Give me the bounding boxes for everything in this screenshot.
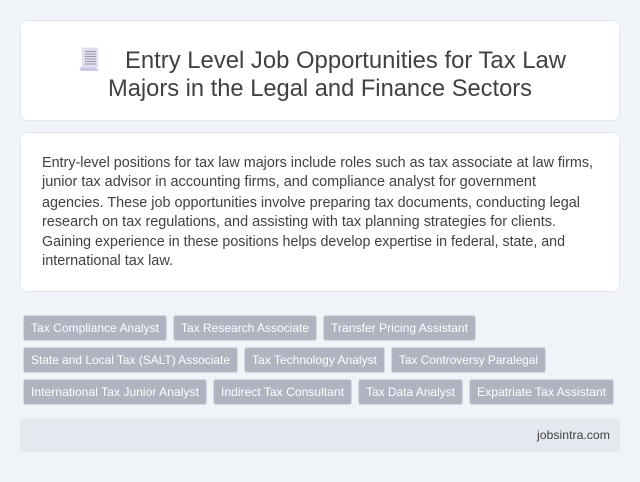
- tag: Tax Data Analyst: [366, 385, 456, 399]
- text block: description: Entry-level positions for tax law majors include roles such as tax associate at law firms,: [42, 155, 593, 171]
- tag: Tax Technology Analyst: [252, 353, 378, 367]
- title: [108, 47, 567, 102]
- tag: Expatriate Tax Assistant: [477, 385, 607, 399]
- footer text: jobsintra.com: [536, 428, 610, 442]
- text block: description: agencies. These job opportunities involve preparing tax documents, conducting legal: [42, 195, 580, 211]
- tag: [24, 348, 238, 372]
- tag: Transfer Pricing Assistant: [331, 321, 469, 335]
- tag: International Tax Junior Analyst: [31, 385, 200, 399]
- panel: title card: [20, 20, 620, 120]
- text block: description: junior tax advisor in accounting firms, and compliance analyst for government: [41, 174, 536, 190]
- tag: [244, 348, 384, 372]
- footer bar: [20, 418, 620, 452]
- text block: description: [41, 155, 593, 269]
- tag: [24, 380, 206, 404]
- text block: description: Gaining experience in these positions helps develop expertise in federal, state, and: [42, 234, 565, 250]
- tag: [214, 380, 352, 404]
- tag: [358, 380, 462, 404]
- tag: Indirect Tax Consultant: [221, 385, 345, 399]
- tag: [24, 316, 166, 340]
- tag: Tax Research Associate: [181, 321, 309, 335]
- panel: description: [20, 132, 620, 292]
- text block: description: research on tax regulations, and assisting with tax planning strategies for clients.: [42, 214, 556, 230]
- tag: [392, 348, 546, 372]
- tag: [174, 316, 316, 340]
- tag: Tax Controversy Paralegal: [399, 353, 538, 367]
- tags: [24, 316, 614, 404]
- tag: State and Local Tax (SALT) Associate: [31, 353, 230, 367]
- tag: [470, 380, 614, 404]
- title: Entry Level Job Opportunities for Tax Law: [125, 47, 567, 74]
- text block: description: international tax law.: [42, 253, 173, 269]
- tag: [324, 316, 476, 340]
- icon: receipt document: [80, 48, 99, 71]
- tag: Tax Compliance Analyst: [31, 321, 160, 335]
- title: Majors in the Legal and Finance Sectors: [108, 75, 532, 102]
